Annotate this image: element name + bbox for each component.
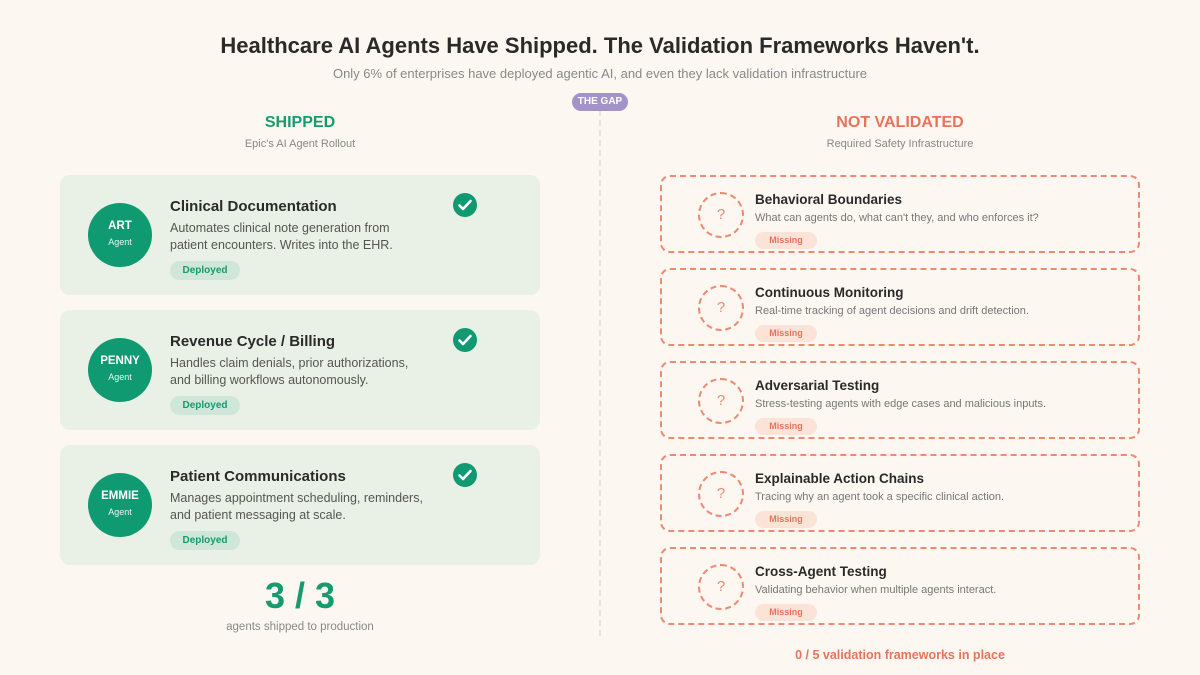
heading: shipped: Epic's AI Agent Rollout bbox=[245, 138, 355, 150]
card: continuous monitoring: Missing bbox=[769, 328, 803, 338]
stat: shipped: agents shipped to production bbox=[226, 621, 374, 633]
card: EMMIE: Deployed bbox=[182, 535, 228, 546]
heading: shipped bbox=[245, 114, 356, 150]
heading: not validated: Required Safety Infrastructure bbox=[827, 138, 973, 150]
icon: PENNY avatar: PENNY bbox=[100, 355, 140, 367]
card: continuous monitoring: Continuous Monitoring bbox=[755, 285, 903, 300]
icon: check bbox=[453, 328, 477, 352]
card: ART: Automates clinical note generation from patient encounters. Writes into the EHR. bbox=[170, 221, 393, 252]
icon: question: ? bbox=[717, 299, 725, 316]
card: PENNY: Deployed bbox=[182, 400, 228, 411]
icon: ART avatar: Agent bbox=[108, 237, 132, 247]
card: behavioral boundaries: Missing bbox=[769, 235, 803, 245]
icon: PENNY avatar: Agent bbox=[108, 372, 132, 382]
card: explainable action chains: Explainable Action Chains bbox=[755, 471, 924, 486]
card: PENNY: Revenue Cycle / Billing bbox=[170, 333, 335, 350]
card: continuous monitoring: Real-time tracking of agent decisions and drift detection. bbox=[755, 305, 1029, 317]
card: adversarial testing: Missing bbox=[769, 421, 803, 431]
card: behavioral boundaries: Behavioral Boundaries bbox=[755, 192, 902, 207]
card: behavioral boundaries bbox=[660, 175, 1140, 253]
stat: validation: 0 / 5 validation frameworks in place bbox=[795, 648, 1005, 662]
icon: EMMIE avatar bbox=[88, 473, 152, 537]
gap pill: THE GAP bbox=[578, 96, 622, 107]
card: cross-agent testing: Validating behavior when multiple agents interact. bbox=[755, 584, 996, 596]
icon: check bbox=[453, 463, 477, 487]
card: PENNY bbox=[60, 310, 540, 430]
icon: question: ? bbox=[717, 485, 725, 502]
stat: shipped: 3 / 3 bbox=[265, 575, 335, 616]
card: explainable action chains bbox=[660, 454, 1140, 532]
icon: question bbox=[698, 192, 744, 238]
icon: question bbox=[698, 564, 744, 610]
icon: ART avatar bbox=[88, 203, 152, 267]
heading: shipped: SHIPPED bbox=[265, 114, 335, 131]
divider bbox=[599, 110, 601, 636]
subtitle: Only 6% of enterprises have deployed agentic AI, and even they lack validation infrastructure bbox=[333, 66, 867, 81]
icon: check bbox=[453, 193, 477, 217]
heading: not validated bbox=[827, 114, 973, 150]
icon: ART avatar: ART bbox=[108, 220, 132, 232]
card: explainable action chains: Missing bbox=[769, 514, 803, 524]
card: PENNY: Handles claim denials, prior authorizations, and billing workflows autonomously. bbox=[170, 356, 408, 386]
icon: question bbox=[698, 471, 744, 517]
icon: PENNY avatar bbox=[88, 338, 152, 402]
card: adversarial testing: Adversarial Testing bbox=[755, 378, 879, 393]
card: EMMIE bbox=[60, 445, 540, 565]
icon: question bbox=[698, 285, 744, 331]
card: ART: Deployed bbox=[182, 265, 228, 276]
icon: EMMIE avatar: Agent bbox=[108, 507, 132, 517]
card: cross-agent testing: Missing bbox=[769, 607, 803, 617]
icon: question: ? bbox=[717, 392, 725, 409]
icon: EMMIE avatar: EMMIE bbox=[101, 490, 139, 502]
title: Healthcare AI Agents Have Shipped. The Validation Frameworks Haven't. bbox=[220, 33, 980, 58]
heading: not validated: NOT VALIDATED bbox=[836, 114, 964, 131]
card: adversarial testing: Stress-testing agents with edge cases and malicious inputs. bbox=[755, 398, 1046, 410]
card: explainable action chains: Tracing why an agent took a specific clinical action. bbox=[755, 491, 1004, 503]
icon: question: ? bbox=[717, 206, 725, 223]
card: adversarial testing bbox=[660, 361, 1140, 439]
icon: question bbox=[698, 378, 744, 424]
card: continuous monitoring bbox=[660, 268, 1140, 346]
icon: question: ? bbox=[717, 578, 725, 595]
card: ART: Clinical Documentation bbox=[170, 198, 337, 215]
card: cross-agent testing bbox=[660, 547, 1140, 625]
gap pill bbox=[572, 93, 628, 111]
stat: shipped bbox=[226, 575, 374, 633]
card: ART bbox=[60, 175, 540, 295]
card: EMMIE: Manages appointment scheduling, reminders, and patient messaging at scale. bbox=[170, 491, 423, 522]
card: cross-agent testing: Cross-Agent Testing bbox=[755, 564, 887, 579]
card: behavioral boundaries: What can agents do, what can't they, and who enforces it? bbox=[755, 212, 1039, 224]
card: EMMIE: Patient Communications bbox=[170, 468, 346, 485]
